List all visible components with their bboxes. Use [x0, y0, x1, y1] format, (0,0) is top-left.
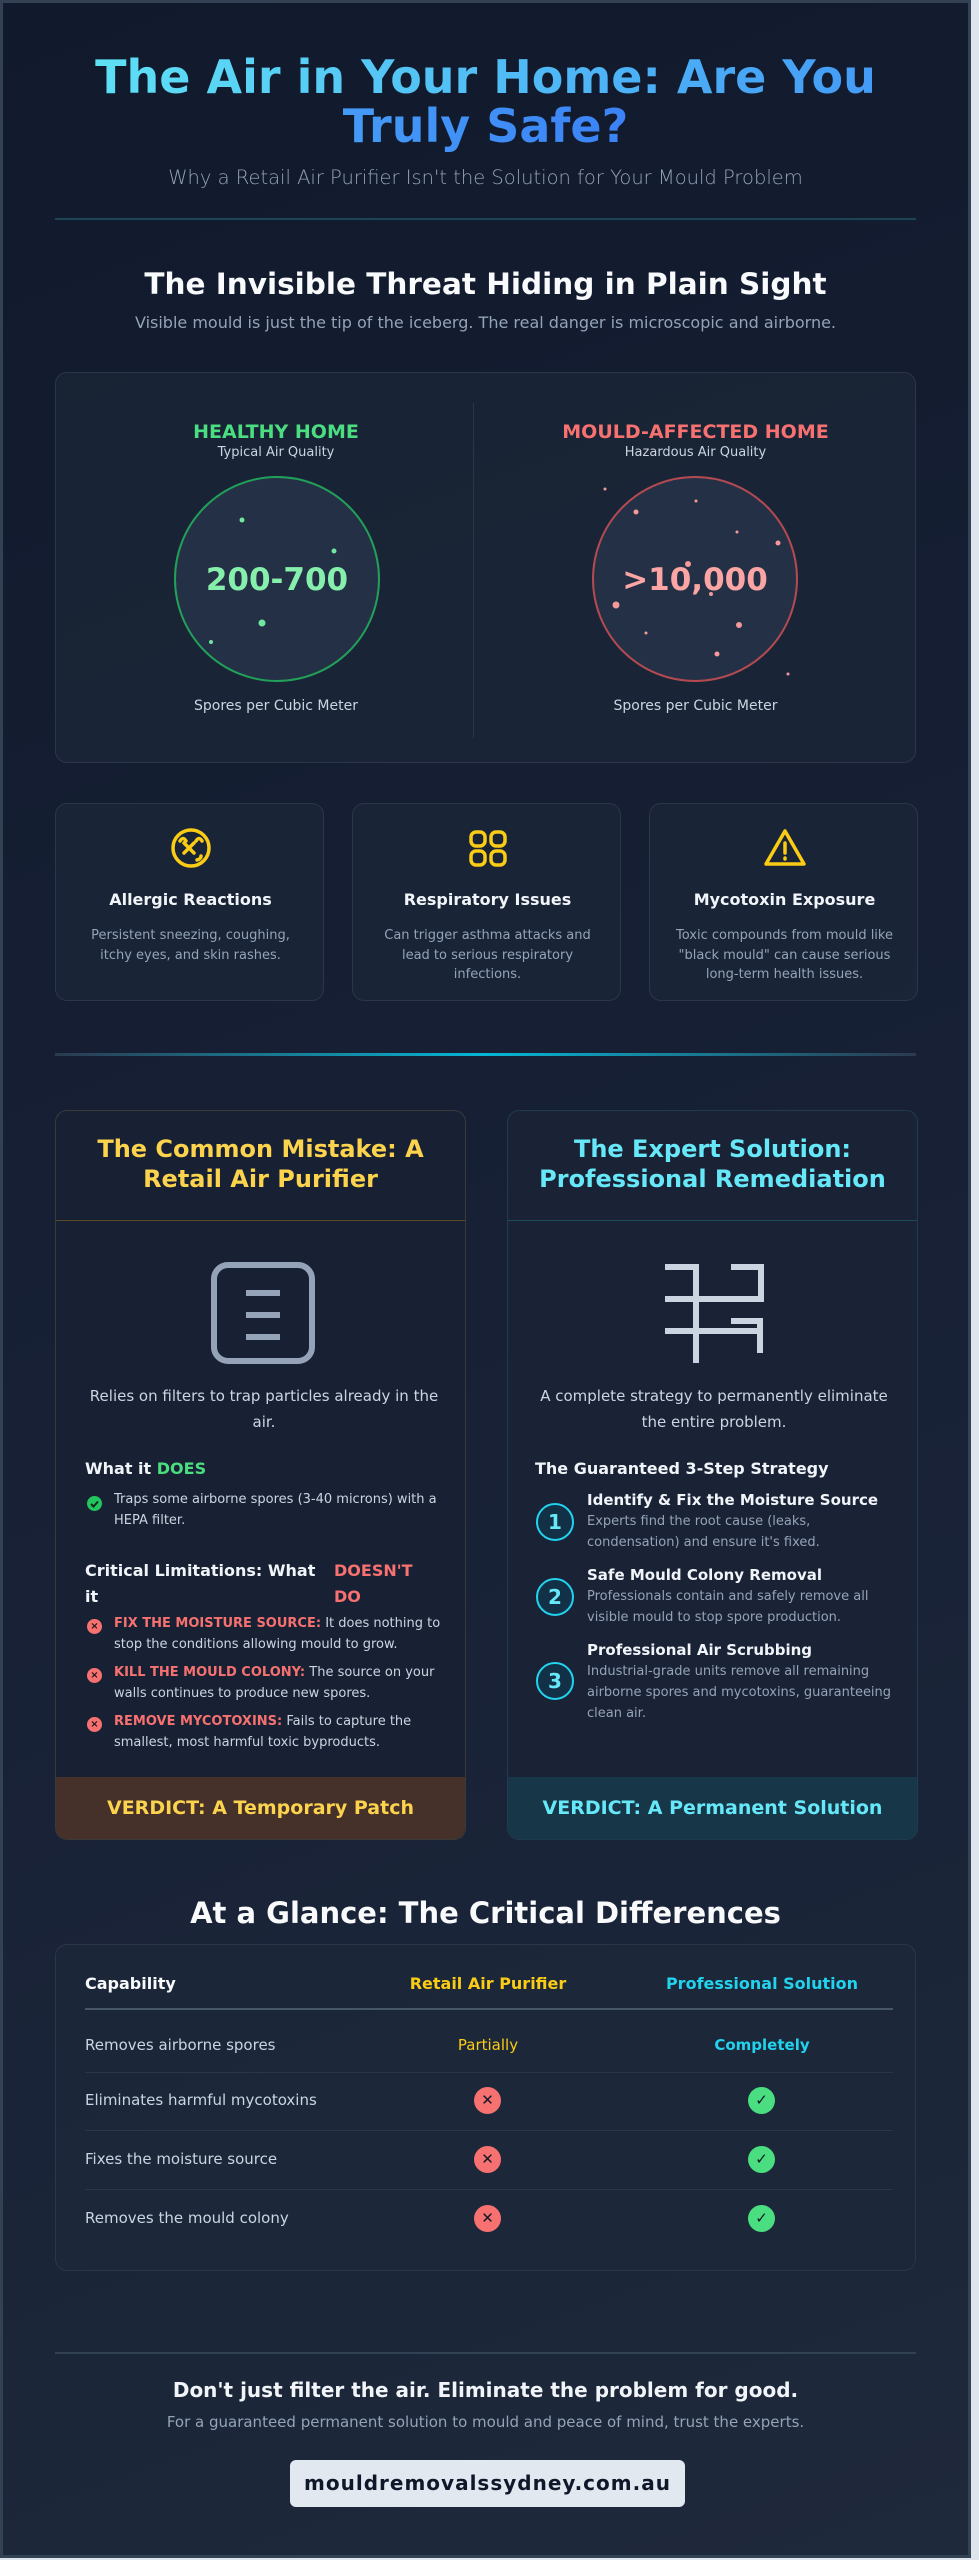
circle: mould [592, 476, 798, 682]
icon: lungs grid [469, 830, 507, 867]
healthy home: Typical Air Quality [218, 445, 334, 460]
text: Removes the mould colony [85, 2209, 289, 2227]
step 2 [536, 1578, 574, 1616]
table: comparison [55, 1944, 916, 2271]
heading: expert solution: The Expert Solution: [574, 1135, 851, 1163]
mould-affected home: Spores per Cubic Meter [614, 698, 777, 714]
mould-affected home [562, 421, 829, 714]
icon: filter [211, 1262, 315, 1364]
text: Traps some airborne spores (3-40 microns) with a HEPA filter. [114, 1492, 437, 1528]
mould-affected home: Hazardous Air Quality [625, 445, 766, 460]
item: colony [87, 1668, 102, 1683]
text: ✕ [481, 2209, 494, 2227]
heading: common mistake [97, 1135, 424, 1193]
healthy home: HEALTHY HOME [193, 421, 359, 443]
circle: healthy [174, 476, 380, 682]
text: Fixes the moisture source [85, 2150, 277, 2168]
panel: expert solution [507, 1110, 918, 1840]
text: Retail Air Purifier [410, 1974, 566, 1993]
healthy home [174, 421, 380, 714]
heading: expert solution [539, 1135, 886, 1193]
subheading: Visible mould is just the tip of the iceberg. The real danger is microscopic and airborne. [135, 313, 836, 332]
text: filter description: Relies on filters to trap particles already in the air. [90, 1387, 438, 1431]
circle: mould: >10,000 [622, 562, 768, 598]
text: Capability [85, 1974, 176, 1993]
card: respiratory issues: Respiratory Issues [404, 890, 571, 909]
card: allergic reactions: Allergic Reactions [109, 890, 272, 909]
text: Safe Mould Colony Removal [587, 1566, 822, 1584]
title: Truly Safe? [343, 99, 628, 153]
text: condensation) and ensure it's fixed. [587, 1535, 820, 1550]
heading: expert solution: Professional Remediation [539, 1165, 886, 1193]
text: Professional Air Scrubbing [587, 1641, 812, 1659]
subtitle: Why a Retail Air Purifier Isn't the Solution for Your Mould Problem [168, 166, 803, 189]
circle: healthy: 200-700 [206, 562, 348, 598]
heading: what it does: What it DOES [85, 1459, 206, 1478]
text: Professionals contain and safely remove all visible mould to stop spore production. [587, 1589, 868, 1625]
step 1 [536, 1503, 574, 1541]
card: allergic reactions: Persistent sneezing, coughing, itchy eyes, and skin rashes. [91, 928, 290, 962]
step 1: 1 [548, 1510, 562, 1534]
item: moisture: × [90, 1621, 99, 1632]
heading: invisible threat: The Invisible Threat Hiding in Plain Sight [144, 267, 827, 301]
text: solution description: A complete strategy to permanently eliminate the entire problem. [540, 1387, 888, 1431]
footer: call to action: Don't just filter the air. Eliminate the problem for good. [173, 2378, 798, 2402]
verdict: temporary [56, 1777, 465, 1839]
card: allergic reactions [55, 803, 324, 1001]
verdict: permanent: VERDICT: A Permanent Solution [543, 1797, 882, 1819]
card: mycotoxin exposure: Toxic compounds from mould like "black mould" can cause serious long-term health issues. [676, 928, 893, 982]
card: respiratory issues: Can trigger asthma attacks and lead to serious respiratory infections. [384, 928, 591, 982]
button: website [290, 2460, 685, 2507]
icon: allergy face [171, 828, 211, 868]
healthy home: Spores per Cubic Meter [194, 698, 358, 714]
text: Completely [714, 2036, 810, 2054]
text: ✓ [755, 2091, 768, 2109]
item: mycotoxins [87, 1717, 102, 1732]
text: ✕ [481, 2150, 494, 2168]
mould-affected home: MOULD-AFFECTED HOME [562, 421, 829, 443]
heading: limitations: Critical Limitations: What it [85, 1561, 315, 1606]
text: REMOVE MYCOTOXINS: Fails to capture the smallest, most harmful toxic byproducts. [114, 1714, 411, 1750]
text: ✓ [755, 2209, 768, 2227]
card: mycotoxin exposure [649, 803, 918, 1001]
text: KILL THE MOULD COLONY: The source on your walls continues to produce new spores. [114, 1665, 434, 1701]
text: airborne spores and mycotoxins, guaranteeing [587, 1685, 891, 1700]
card: respiratory issues [352, 803, 621, 1001]
item: colony: × [90, 1670, 99, 1681]
step 2: 2 [548, 1585, 562, 1609]
button: website: mouldremovalssydney.com.au [304, 2471, 671, 2495]
text: DOESN'T DO [334, 1561, 413, 1606]
card: mycotoxin exposure: Mycotoxin Exposure [694, 890, 875, 909]
text: ✓ [755, 2150, 768, 2168]
panel: common mistake [55, 1110, 466, 1840]
title [95, 50, 876, 153]
footer: sub text: For a guaranteed permanent solution to mould and peace of mind, trust the experts. [167, 2413, 804, 2431]
heading: common mistake: The Common Mistake: A [97, 1135, 424, 1163]
title: The Air in Your Home: Are You [95, 50, 876, 104]
text: Removes airborne spores [85, 2036, 275, 2054]
heading: common mistake: Retail Air Purifier [143, 1165, 378, 1193]
step 3: 3 [548, 1669, 562, 1693]
icon: remediation [665, 1264, 764, 1363]
item: moisture [87, 1619, 102, 1634]
verdict: temporary: VERDICT: A Temporary Patch [107, 1797, 414, 1819]
item: mycotoxins: × [90, 1719, 99, 1730]
text: ✕ [481, 2091, 494, 2109]
panel: spore comparison [55, 372, 916, 763]
step 3 [536, 1662, 574, 1700]
text: clean air. [587, 1706, 646, 1721]
text: Professional Solution [666, 1974, 858, 1993]
icon: warning [764, 829, 806, 866]
heading: 3-step: The Guaranteed 3-Step Strategy [535, 1459, 829, 1478]
heading: at a glance: At a Glance: The Critical Differences [190, 1896, 781, 1930]
text: Eliminates harmful mycotoxins [85, 2091, 317, 2109]
text: Partially [458, 2036, 518, 2054]
text: FIX THE MOISTURE SOURCE: It does nothing to stop the conditions allowing mould to grow. [114, 1616, 440, 1652]
verdict: permanent [508, 1777, 917, 1839]
text: Industrial-grade units remove all remaining [587, 1664, 869, 1679]
text: Identify & Fix the Moisture Source [587, 1491, 878, 1509]
text: Experts find the root cause (leaks, [587, 1514, 810, 1529]
item: traps spores [87, 1496, 102, 1511]
